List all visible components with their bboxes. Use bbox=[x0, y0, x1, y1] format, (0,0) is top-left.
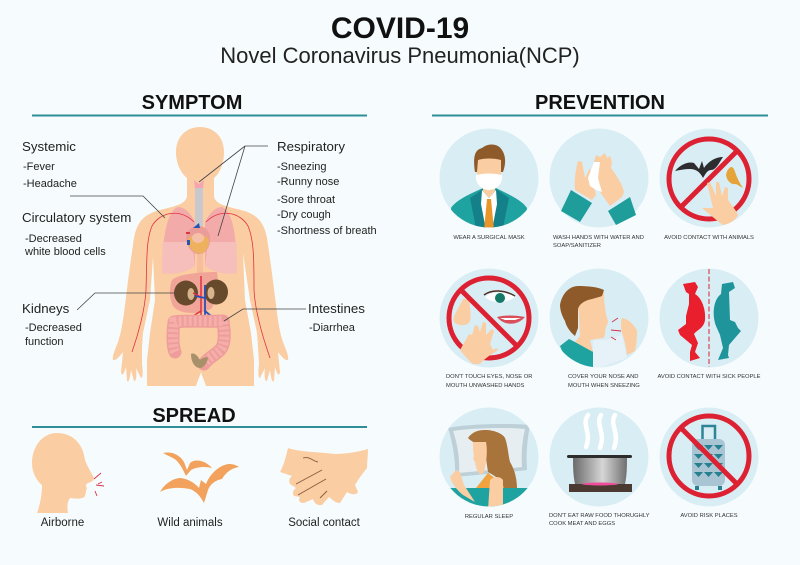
spread: social contact: Social contact bbox=[288, 517, 361, 529]
kidneys bbox=[174, 280, 198, 306]
prevention: cover nose and mouth when sneezing bbox=[550, 268, 648, 389]
heading: symptom: SYMPTOM bbox=[142, 92, 242, 114]
text: systemic: -Headache bbox=[23, 178, 77, 190]
text: circulatory system bbox=[22, 210, 131, 258]
vessels bbox=[193, 276, 201, 316]
text: circulatory system: Circulatory system bbox=[22, 210, 131, 225]
title bbox=[220, 12, 580, 68]
prevention: wash hands: SOAP/SANITIZER bbox=[553, 243, 601, 249]
prevention: cook meat and eggs bbox=[549, 408, 650, 527]
circulatory arteries bbox=[132, 213, 194, 352]
text: kidneys: -Decreased bbox=[25, 322, 82, 334]
body silhouette bbox=[113, 127, 288, 386]
large intestine bbox=[173, 321, 224, 364]
text: respiratory: Respiratory bbox=[277, 139, 345, 154]
prevention: don't touch eyes, nose or mouth bbox=[440, 268, 538, 389]
spread: airborne bbox=[32, 433, 104, 529]
text: intestines: -Diarrhea bbox=[309, 322, 356, 334]
bladder bbox=[191, 353, 208, 368]
prevention: cook meat and eggs: DON'T EAT RAW FOOD THORUGHLY bbox=[549, 513, 650, 519]
esophagus bbox=[197, 225, 203, 275]
prevention: cook meat and eggs: COOK MEAT AND EGGS bbox=[549, 521, 615, 527]
title: Novel Coronavirus Pneumonia(NCP) bbox=[220, 43, 580, 68]
prevention: wear a surgical mask: WEAR A SURGICAL MASK bbox=[453, 235, 525, 241]
text: circulatory system: -Decreased bbox=[25, 233, 82, 245]
prevention: regular sleep bbox=[438, 408, 540, 520]
prevention: wear a surgical mask bbox=[440, 128, 538, 241]
lungs bbox=[162, 207, 195, 274]
prevention: avoid risk places: AVOID RISK PLACES bbox=[680, 513, 738, 519]
panel: body anatomy bbox=[113, 127, 288, 386]
heading: spread: SPREAD bbox=[152, 405, 236, 427]
prevention: avoid risk places bbox=[660, 408, 758, 519]
prevention: avoid contact with sick people bbox=[657, 268, 761, 380]
heart bbox=[186, 226, 210, 254]
text: kidneys: function bbox=[25, 336, 64, 348]
text: kidneys: Kidneys bbox=[22, 301, 70, 316]
liver and stomach bbox=[170, 272, 218, 313]
text: systemic: -Fever bbox=[23, 161, 55, 173]
text: systemic bbox=[22, 139, 77, 190]
prevention: avoid contact with sick people: AVOID CONTACT WITH SICK PEOPLE bbox=[657, 374, 761, 380]
text: respiratory: -Sneezing bbox=[277, 161, 327, 173]
spread: wild animals bbox=[157, 452, 239, 529]
spread: wild animals: Wild animals bbox=[157, 517, 223, 529]
leader lines bbox=[70, 146, 306, 321]
spread: social contact bbox=[280, 448, 368, 529]
text: respiratory bbox=[277, 139, 377, 237]
text: intestines bbox=[308, 301, 365, 334]
text: respiratory: -Runny nose bbox=[277, 176, 339, 188]
text: respiratory: -Shortness of breath bbox=[277, 225, 377, 237]
prevention: cover nose and mouth when sneezing: MOUTH WHEN SNEEZING bbox=[568, 383, 640, 389]
prevention: wash hands: WASH HANDS WITH WATER AND bbox=[553, 235, 644, 241]
text: intestines: Intestines bbox=[308, 301, 365, 316]
trachea bbox=[195, 187, 203, 226]
prevention: wash hands bbox=[550, 128, 648, 249]
text: respiratory: -Dry cough bbox=[277, 209, 331, 221]
prevention: cover nose and mouth when sneezing: COVER YOUR NOSE AND bbox=[568, 374, 638, 380]
prevention: regular sleep: REGULAR SLEEP bbox=[465, 514, 513, 520]
prevention: avoid contact with animals: AVOID CONTACT WITH ANIMALS bbox=[664, 235, 754, 241]
text: kidneys bbox=[22, 301, 82, 348]
prevention: don't touch eyes, nose or mouth: DON'T TOUCH EYES, NOSE OR bbox=[446, 374, 532, 380]
prevention: don't touch eyes, nose or mouth: MOUTH UNWASHED HANDS bbox=[446, 383, 524, 389]
text: respiratory: -Sore throat bbox=[277, 194, 335, 206]
text: systemic: Systemic bbox=[22, 139, 76, 154]
title: COVID-19 bbox=[331, 12, 469, 45]
heading: prevention: PREVENTION bbox=[535, 92, 665, 114]
text: circulatory system: white blood cells bbox=[24, 246, 106, 258]
prevention: avoid contact with animals bbox=[660, 128, 758, 241]
spread: airborne: Airborne bbox=[41, 517, 84, 529]
